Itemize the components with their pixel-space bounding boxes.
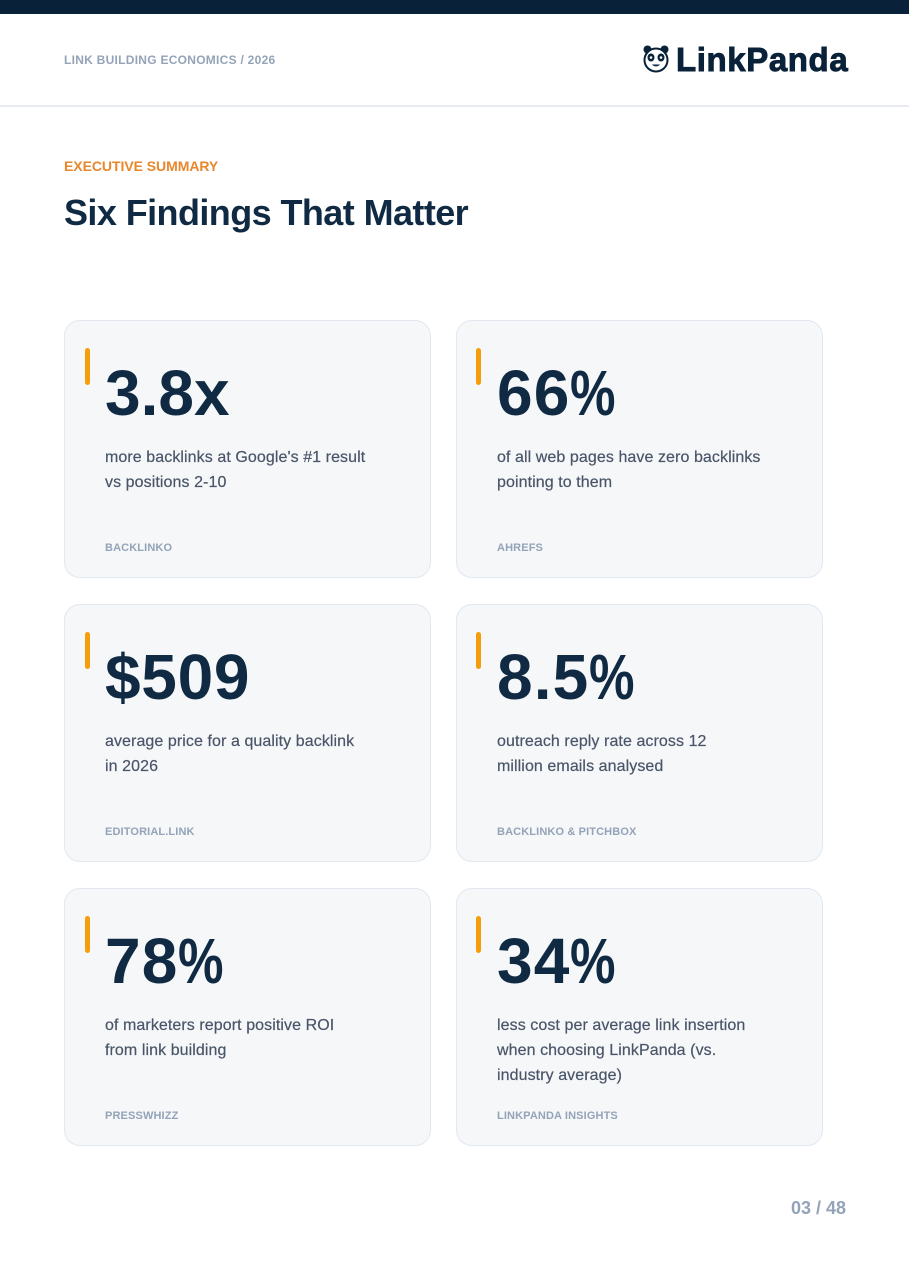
report label: LINK BUILDING ECONOMICS / 2026 bbox=[64, 53, 275, 67]
description bbox=[105, 1017, 334, 1059]
stat: 3.8x bbox=[105, 357, 230, 429]
description: of marketers report positive ROI bbox=[105, 1017, 334, 1034]
description: of all web pages have zero backlinks bbox=[497, 449, 760, 466]
description: when choosing LinkPanda (vs. bbox=[497, 1042, 716, 1059]
accent bar bbox=[476, 348, 481, 385]
icon: panda bbox=[644, 46, 668, 72]
source: PRESSWHIZZ bbox=[105, 1110, 178, 1122]
panel: card 34% bbox=[456, 888, 823, 1146]
description: from link building bbox=[105, 1042, 226, 1059]
description bbox=[105, 449, 366, 491]
stat bbox=[497, 925, 616, 997]
panel: card 8.5% bbox=[456, 604, 823, 862]
description bbox=[497, 449, 760, 491]
description: average price for a quality backlink bbox=[105, 733, 354, 750]
stat: % bbox=[178, 925, 224, 997]
description bbox=[497, 733, 707, 775]
accent bar bbox=[476, 916, 481, 953]
description: vs positions 2-10 bbox=[105, 474, 226, 491]
stat: $509 bbox=[105, 641, 250, 713]
title: Six Findings That Matter bbox=[64, 192, 468, 233]
stat: 34 bbox=[497, 925, 570, 997]
panel: card $509 bbox=[64, 604, 431, 862]
panel: card 78% bbox=[64, 888, 431, 1146]
description bbox=[496, 1017, 745, 1084]
description: more backlinks at Google's #1 result bbox=[105, 449, 365, 466]
stat: 66 bbox=[497, 357, 570, 429]
stat: % bbox=[570, 357, 616, 429]
description: less cost per average link insertion bbox=[497, 1017, 745, 1034]
accent bar bbox=[476, 632, 481, 669]
top bar bbox=[0, 0, 909, 14]
panel: card 3.8x bbox=[64, 320, 431, 578]
header bbox=[0, 14, 909, 107]
source: LINKPANDA INSIGHTS bbox=[497, 1110, 618, 1122]
source: BACKLINKO bbox=[105, 542, 172, 554]
description: outreach reply rate across 12 bbox=[497, 733, 707, 750]
logo wordmark: LinkPanda bbox=[676, 41, 848, 78]
stat: 78 bbox=[105, 925, 178, 997]
description: industry average) bbox=[497, 1067, 622, 1084]
stat: 8.5 bbox=[497, 641, 589, 713]
description: million emails analysed bbox=[497, 758, 663, 775]
description: in 2026 bbox=[105, 758, 158, 775]
source: AHREFS bbox=[497, 542, 543, 554]
page number: 03 / 48 bbox=[791, 1198, 846, 1218]
panel: card 66% bbox=[456, 320, 823, 578]
stat bbox=[497, 641, 635, 713]
accent bar bbox=[85, 632, 90, 669]
stat bbox=[105, 925, 224, 997]
description: pointing to them bbox=[497, 474, 612, 491]
stat: % bbox=[589, 641, 635, 713]
source: EDITORIAL.LINK bbox=[105, 826, 195, 838]
accent bar bbox=[85, 916, 90, 953]
source: BACKLINKO & PITCHBOX bbox=[497, 826, 636, 838]
stat bbox=[497, 357, 616, 429]
eyebrow: EXECUTIVE SUMMARY bbox=[64, 158, 218, 174]
stat: % bbox=[570, 925, 616, 997]
description bbox=[105, 733, 354, 775]
logo: LinkPanda bbox=[644, 41, 848, 78]
accent bar bbox=[85, 348, 90, 385]
